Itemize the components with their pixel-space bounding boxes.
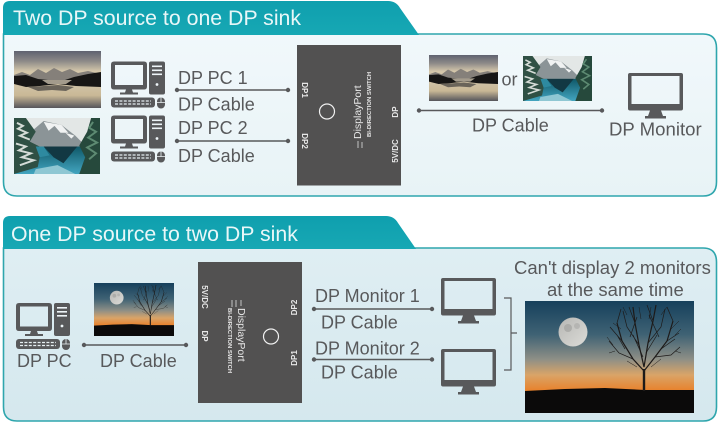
icon: PC 1 — [111, 62, 165, 108]
label: DP Cable: DP Cable — [178, 146, 255, 166]
switch device: DP1 — [300, 82, 309, 98]
photo: alpine lake — [14, 118, 100, 174]
caption — [514, 257, 711, 300]
caption: at the same time — [547, 279, 684, 300]
label: DP Cable: DP Cable — [178, 94, 255, 114]
switch device — [297, 45, 401, 186]
photo: moon at dusk large — [525, 301, 694, 413]
icon: DP PC — [16, 303, 70, 350]
label: DP Cable: DP Cable — [321, 312, 398, 332]
switch device: 5V/DC — [200, 285, 209, 309]
label: DP Monitor 1: DP Monitor 1 — [315, 286, 420, 306]
panel body — [4, 248, 716, 421]
heading: Two DP source to one DP sink — [13, 6, 301, 30]
label: DP PC 2: DP PC 2 — [178, 118, 248, 138]
label: DP Monitor: DP Monitor — [609, 118, 702, 140]
photo: output option 2 — [523, 56, 592, 101]
heading tab — [3, 1, 419, 35]
cable line 1 — [175, 88, 290, 92]
label: DP Monitor 2: DP Monitor 2 — [315, 338, 420, 358]
cable line from PC — [82, 343, 188, 347]
label: DP PC: DP PC — [17, 351, 72, 371]
switch device: DisplayPort — [235, 308, 247, 362]
switch device: DP2 — [300, 133, 309, 149]
heading tab — [3, 216, 416, 249]
label: DP Cable: DP Cable — [472, 116, 549, 136]
label: DP Cable: DP Cable — [100, 351, 177, 371]
label: DP Cable: DP Cable — [321, 362, 398, 382]
cable line 2 — [312, 358, 434, 361]
heading: One DP source to two DP sink — [11, 222, 298, 246]
switch device — [198, 262, 302, 403]
icon: monitor 1 — [441, 278, 496, 324]
text: or: or — [502, 70, 518, 90]
caption: Can't display 2 monitors — [514, 257, 711, 278]
switch device: BI-DIRECTION SWITCH — [226, 308, 232, 373]
label: DP PC 1: DP PC 1 — [178, 68, 248, 88]
switch device: DisplayPort — [352, 85, 364, 139]
panel: two DP source to one DP sink — [3, 1, 716, 196]
panel: one DP source to two DP sink — [3, 216, 716, 421]
icon: DP monitor — [628, 73, 683, 118]
switch device: 5V/DC — [391, 139, 400, 163]
panel body — [4, 34, 716, 196]
photo: moon at dusk small — [94, 283, 174, 336]
icon: PC 2 — [111, 116, 165, 162]
switch device: DP — [200, 330, 209, 342]
cable line to monitor — [417, 109, 604, 112]
photo: output option 1 — [429, 55, 498, 101]
cable line 2 — [175, 139, 290, 143]
switch device: DP — [391, 106, 400, 118]
icon: monitor 2 — [441, 349, 496, 394]
bracket — [504, 298, 517, 370]
photo: mountain lake at dawn — [14, 51, 101, 108]
cable line 1 — [312, 307, 434, 311]
switch device: DP1 — [290, 350, 299, 366]
switch device: BI-DIRECTION SWITCH — [367, 72, 373, 137]
switch device: DP2 — [290, 299, 299, 315]
